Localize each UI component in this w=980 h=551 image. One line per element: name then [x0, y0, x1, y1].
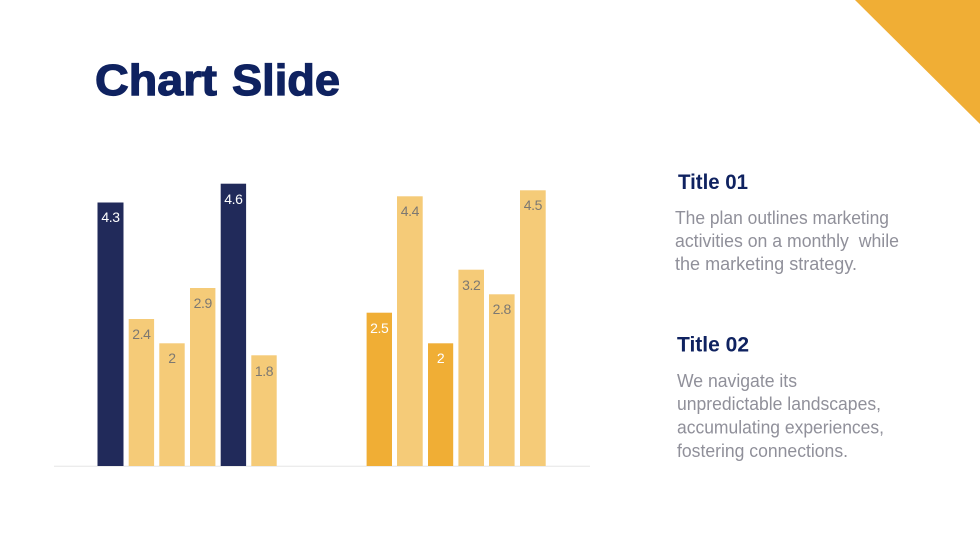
heading: Title 01: Title 01: [678, 171, 748, 194]
bar 2.4: 2.4: [132, 326, 151, 342]
chart group 2: [367, 190, 546, 466]
text block: Title 02 description: fostering connections.: [677, 441, 848, 461]
text block: Title 01 description: [675, 208, 899, 274]
bar 2.9: 2.9: [194, 295, 212, 311]
bar 4.4: [397, 196, 423, 466]
bar 2.8: 2.8: [493, 301, 512, 317]
bar 4.3: 4.3: [101, 209, 120, 225]
bar 4.6: [221, 184, 246, 466]
bar 2.5: 2.5: [370, 320, 389, 336]
bar chart: [54, 184, 590, 466]
bar 2.9: [190, 288, 215, 466]
chart group 1: [98, 184, 277, 466]
text block: Title 01 description: The plan outlines marketing: [675, 208, 889, 228]
text block: Title 02 description: unpredictable landscapes,: [677, 394, 881, 414]
text block: Title 01 description: activities on a monthly while: [675, 231, 899, 251]
title: Chart: [95, 56, 217, 105]
text block: Title 02 description: [677, 371, 884, 461]
bar 2: [428, 343, 453, 466]
bar 4.4: 4.4: [401, 203, 420, 219]
bar 2.5: [367, 313, 392, 466]
title: Slide: [232, 56, 340, 105]
heading: Title 02: Title 02: [677, 334, 749, 356]
bar 1.8: [251, 355, 277, 466]
title: [95, 56, 340, 105]
bar 4.3: [98, 202, 124, 466]
text block: Title 02 description: accumulating experiences,: [677, 418, 884, 438]
bar 2: 2: [437, 350, 445, 366]
bar 3.2: 3.2: [462, 277, 481, 293]
bar 4.6: 4.6: [224, 191, 243, 207]
bar 2.8: [489, 294, 515, 466]
bar 2: [159, 343, 185, 466]
text block: Title 01 description: the marketing strategy.: [675, 254, 857, 274]
bar 4.5: 4.5: [524, 197, 543, 213]
bar 2.4: [129, 319, 154, 466]
text block: Title 02 description: We navigate its: [677, 371, 797, 391]
bar 3.2: [458, 270, 484, 466]
bar 4.5: [520, 190, 546, 466]
decorative corner triangle: [855, 0, 980, 124]
bar 2: 2: [168, 350, 176, 366]
bar 1.8: 1.8: [255, 363, 274, 379]
